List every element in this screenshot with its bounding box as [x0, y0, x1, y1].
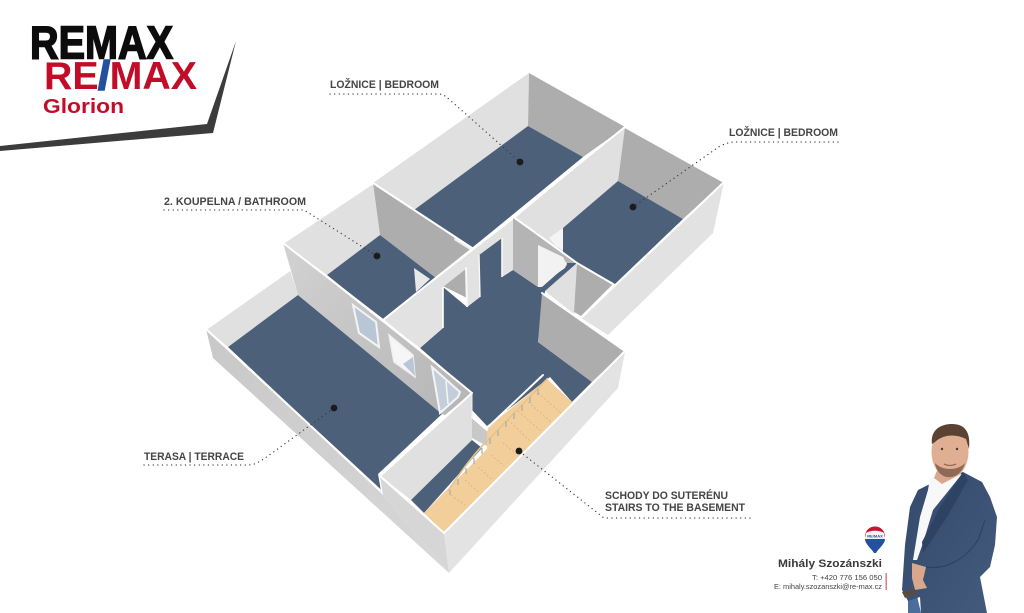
terrace windows and door	[353, 305, 460, 413]
stair railing	[448, 378, 548, 495]
agent photo	[902, 424, 997, 613]
stairs	[424, 378, 573, 533]
callout: stairs	[516, 448, 750, 518]
callout: bathroom	[164, 196, 380, 259]
room: bedroom right	[515, 127, 724, 335]
room: closet	[545, 263, 613, 316]
lapel	[922, 472, 968, 553]
head	[932, 426, 968, 478]
room: stair area	[206, 243, 625, 573]
jacket	[902, 472, 997, 613]
wall: doorways between hall and rooms	[383, 218, 515, 348]
wall: hall to bedroom right with door	[373, 127, 625, 320]
mouth	[944, 464, 956, 466]
agent name: Mihály Szozánszki	[778, 558, 882, 570]
callout: bathroom: 2. KOUPELNA / BATHROOM	[164, 196, 306, 208]
callout: stairs: STAIRS TO THE BASEMENT	[605, 502, 746, 514]
callout: stairs: SCHODY DO SUTERÉNU	[605, 489, 728, 502]
red divider	[886, 573, 887, 590]
hand	[912, 563, 927, 590]
room: bedroom top	[373, 73, 625, 248]
room: hall floor	[420, 238, 592, 426]
logo wordmark red: RE/MAX	[44, 55, 197, 98]
room: bathroom	[283, 183, 472, 320]
logo: RE/MAX Glorion	[0, 16, 236, 151]
logo wordmark black: REMAX	[30, 16, 173, 68]
sleeve shadow	[926, 520, 985, 568]
agent email: E: mihaly.szozanszki@re-max.cz	[774, 582, 882, 591]
room: terrace	[206, 183, 472, 573]
3D floor plan	[206, 73, 724, 573]
beard	[935, 463, 965, 477]
jeans	[908, 596, 921, 613]
callout: bedroom top: LOŽNICE | BEDROOM	[330, 78, 439, 91]
wall: hall right side	[538, 293, 625, 382]
callout: terrace: TERASA | TERRACE	[144, 451, 244, 463]
agent phone: T: +420 776 156 050	[812, 573, 882, 582]
logo office name: Glorion	[43, 96, 124, 118]
eyes	[941, 448, 958, 450]
shirt	[913, 474, 962, 560]
icon: balloon logo: RE/MAX	[867, 534, 883, 538]
agent contact block	[774, 526, 887, 591]
callout: bedroom top	[330, 78, 523, 165]
logo swoosh	[0, 41, 236, 151]
watch	[902, 589, 917, 598]
callout: terrace	[144, 405, 337, 465]
hair	[932, 424, 969, 449]
callout: bedroom right	[630, 126, 838, 210]
neck	[934, 466, 961, 484]
callout: bedroom right: LOŽNICE | BEDROOM	[729, 126, 838, 139]
